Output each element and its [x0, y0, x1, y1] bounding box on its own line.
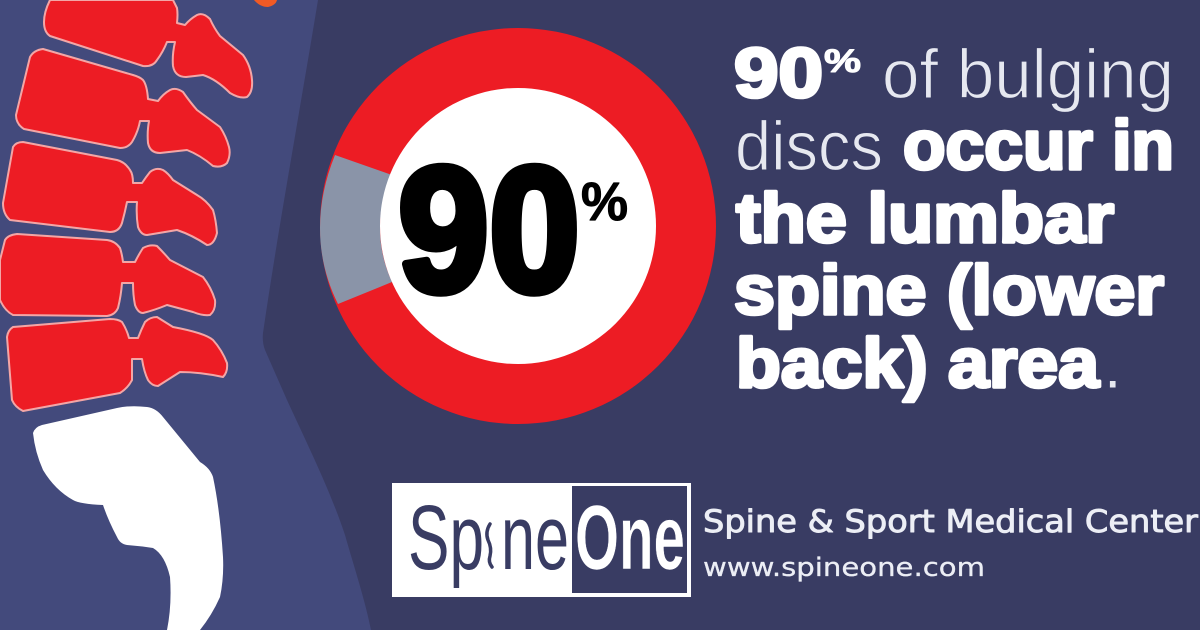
logo word Spine: ne — [501, 487, 569, 589]
headline text — [734, 34, 1174, 403]
logo word One: One — [575, 487, 685, 589]
line 1 — [734, 34, 1174, 113]
vertebra 3 — [3, 142, 217, 245]
donut white center — [380, 88, 656, 364]
line 1: % — [824, 43, 861, 79]
donut gray segment — [320, 155, 392, 304]
line 5: . — [1103, 325, 1122, 403]
donut value: 90 — [398, 130, 580, 329]
donut red ring — [320, 28, 716, 424]
vertebra 4 — [0, 234, 215, 316]
panel: spine background — [0, 0, 371, 630]
logo dark panel — [572, 486, 687, 593]
organisation name: Spine & Sport Medical Center — [703, 504, 1198, 540]
logo: SpineOne — [392, 483, 691, 597]
line 1: 90 — [734, 34, 823, 112]
line 3: the lumbar — [736, 179, 1114, 257]
sacrum — [33, 406, 223, 630]
line 2: discs — [735, 107, 883, 185]
vertebra 5 — [7, 317, 227, 411]
line 1: of bulging — [882, 35, 1174, 113]
line 2 — [735, 106, 1174, 185]
donut percent sign: % — [581, 172, 628, 232]
website: www.spineone.com — [703, 553, 985, 583]
line 5: back) area — [736, 324, 1100, 402]
chart: donut 90 percent — [320, 28, 716, 424]
vertebra 1 — [44, 0, 252, 98]
logo box — [392, 483, 691, 597]
logo squiggle i — [487, 524, 492, 567]
logo word Spine: Sp — [408, 487, 484, 589]
vertebra 2 — [16, 49, 230, 167]
line 2: occur in — [903, 106, 1174, 184]
line 4: spine (lower — [734, 251, 1164, 329]
illustration: lumbar spine — [0, 0, 252, 411]
orange vertebra fragment — [254, 0, 277, 7]
